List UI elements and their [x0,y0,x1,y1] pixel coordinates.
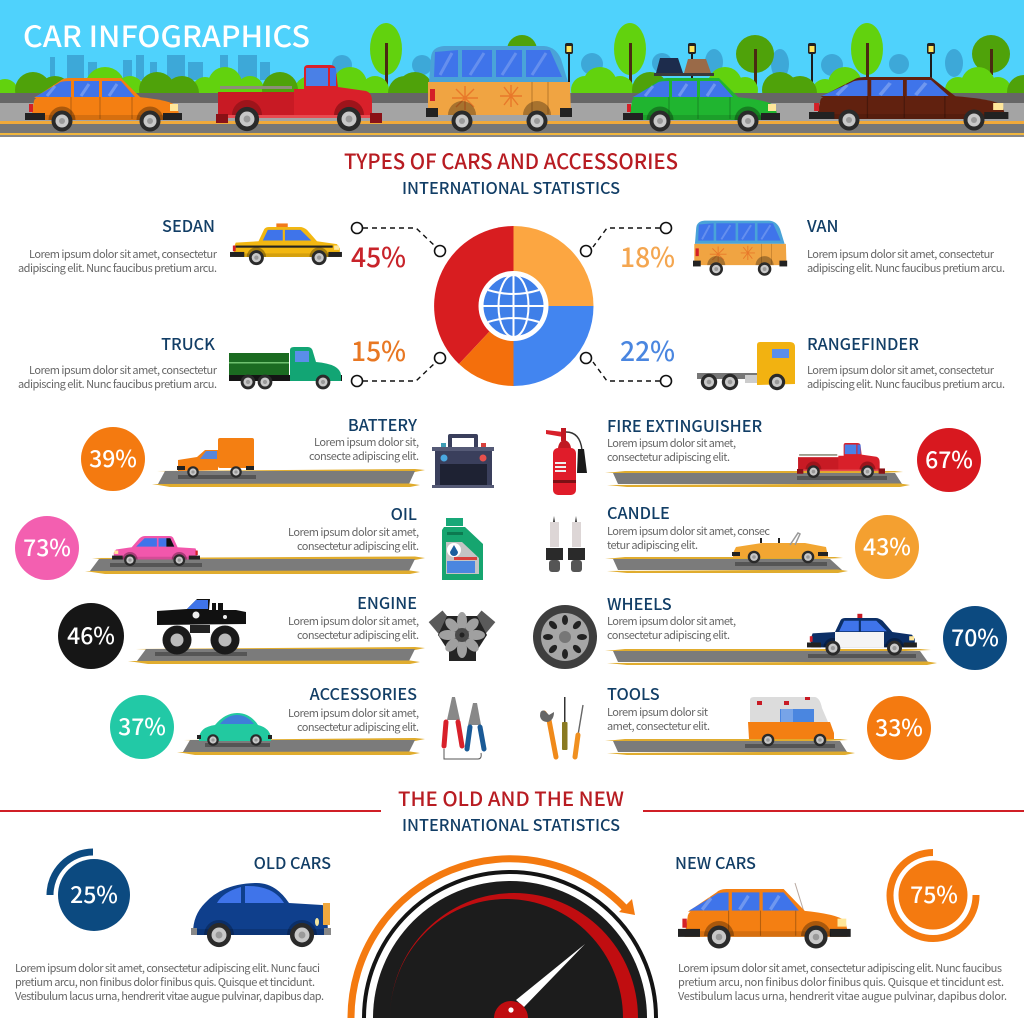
gauge: 75 percent: 75% [910,876,958,910]
text: candle body: Lorem ipsum dolor sit amet, consec [607,523,770,539]
text: tools body: amet, consectetur elit. [607,718,710,734]
city skyline [50,49,963,80]
icon: tools [540,697,583,757]
percent: 46: 46% [67,617,115,651]
panel: van [620,213,1005,276]
text: old cars body: Vestibulum lacus urna, hendrerit vitae augue pulvinar, dapibus dap. [15,988,324,1004]
title: types of cars: TYPES OF CARS AND ACCESSORIES [344,146,678,176]
percent: 67 [917,428,981,492]
panel: tools row [540,681,931,760]
percent: 43: 43% [863,528,911,562]
text: wheels body [607,613,736,643]
percent: 33: 33% [875,709,923,743]
car: green wagon with luggage [623,58,780,132]
percent: 18: 18% [620,236,675,275]
text: van body [807,246,1005,276]
text: van body: Lorem ipsum dolor sit amet, consectetur [807,246,995,262]
car: small pickup [797,443,885,478]
text: fire extinguisher body: consectetur adipiscing elit. [607,449,730,465]
road [605,739,855,755]
percent: 46 [58,603,124,669]
text: rangefinder body: Lorem ipsum dolor sit amet, consectetur [807,362,995,378]
percent: 37 [110,695,174,759]
text: rangefinder body [807,362,1005,392]
panel: engine row [58,590,495,669]
percent: 73 [15,516,79,580]
panel: battery row [81,412,494,491]
text: tools body [607,704,710,734]
header scene [0,0,1024,137]
car: brown limousine [809,77,1008,130]
panel: accessories row [110,681,484,759]
section divider lines [0,810,1024,812]
gauge: 25 percent [50,852,130,931]
text: new cars body: pretium arcu, non finibus dolor finibus quis. Quisque et tincidunt est. [678,974,1004,990]
heading: car infographics: CAR INFOGRAPHICS [23,14,310,56]
icon: extinguisher [546,428,587,495]
heading: fire extinguisher: FIRE EXTINGUISHER [607,413,763,437]
road [128,647,425,664]
speedometer gauge [351,859,656,1018]
subtitle: international statistics: INTERNATIONAL STATISTICS [402,175,620,199]
car: police [807,614,917,655]
percent: 33 [867,696,931,760]
car: teal beetle [197,713,272,746]
text: new cars body: Lorem ipsum dolor sit amet, consectetur adipiscing elit. Nunc faucibus [678,960,1002,976]
text: old cars body: Lorem ipsum dolor sit amet, consectetur adipiscing elit. Nunc fauci [15,960,320,976]
panel: old cars [15,850,331,1004]
icon: battery [432,434,494,488]
text: engine body: Lorem ipsum dolor sit amet, [288,613,419,629]
panel: fire extinguisher row [546,413,981,495]
icon: engine [429,611,495,661]
car: hippie van [426,46,572,132]
heading: candle: CANDLE [607,500,670,524]
icon: jumper cables [444,697,484,759]
heading: wheels: WHEELS [607,591,672,615]
road [0,93,1024,137]
percent: 37: 37% [118,708,166,742]
bushes [0,67,1024,111]
percent: 22: 22% [620,330,675,369]
text: wheels body: consectetur adipiscing elit. [607,627,730,643]
text: engine body [288,613,419,643]
heading: rangefinder: RANGEFINDER [807,331,919,355]
text: truck body: Lorem ipsum dolor sit amet, consectetur [29,362,218,378]
text: engine body: consectetur adipiscing elit. [297,627,419,643]
text: sedan body [18,246,218,276]
text: sedan body: Lorem ipsum dolor sit amet, consectetur [29,246,218,262]
road [152,469,425,487]
road [177,738,425,755]
heading: oil: OIL [391,501,417,525]
percent: 45: 45% [351,236,406,275]
car: box truck [177,438,254,478]
car: small van [693,221,787,276]
heading: accessories: ACCESSORIES [310,681,417,705]
text: accessories body: consectetur adipiscing elit. [297,719,419,735]
trees and lamps [370,23,1010,90]
heading: van: VAN [806,213,838,237]
gauge: 25 percent: 25% [70,876,118,910]
car: monster truck [157,599,246,654]
road [605,649,937,665]
road [605,557,848,573]
car: green truck [229,347,342,389]
road [605,471,910,487]
percent: 67: 67% [925,441,973,475]
car: old blue beetle [191,883,331,947]
text: accessories body: Lorem ipsum dolor sit amet, [288,705,419,721]
panel: candle row [546,500,919,579]
connector lines [352,222,672,386]
panel: sedan [18,213,406,276]
text: new cars body [678,960,1007,1004]
panel: oil row [15,501,483,580]
text: van body: adipiscing elit. Nunc faucibus pretium arcu. [807,260,1005,276]
percent: 39: 39% [89,440,137,474]
icon: spark plugs [546,516,585,572]
panel: new cars [675,850,1007,1004]
percent: 70: 70% [951,619,999,653]
text: sedan body: adipiscing elit. Nunc faucibus pretium arcu. [18,260,217,276]
car: red pickup [216,65,382,131]
percent: 43 [855,515,919,579]
gauge: 75 percent [890,852,976,938]
icon: oil can [442,518,483,580]
text: tools body: Lorem ipsum dolor sit [607,704,708,720]
pie chart [434,226,594,386]
subtitle: international statistics 2: INTERNATIONAL STATISTICS [402,812,620,836]
percent: 39 [81,427,145,491]
heading: new cars: NEW CARS [675,850,756,874]
text: battery body [309,434,419,464]
car: orange wagon [25,78,182,132]
percent: 15: 15% [351,330,406,369]
car: taxi [230,223,342,265]
heading: battery: BATTERY [348,412,418,436]
panel: truck [18,330,406,392]
car: pink sedan [112,536,200,566]
text: fire extinguisher body [607,435,736,465]
text: truck body: adipiscing elit. Nunc faucibus pretium arcu. [18,376,217,392]
text: wheels body: Lorem ipsum dolor sit amet, [607,613,736,629]
text: battery body: Lorem ipsum dolor sit, [314,434,419,450]
heading: truck: TRUCK [161,331,215,355]
percent: 70 [943,606,1007,670]
road [85,556,425,574]
text: old cars body: pretium arcu, non finibus dolor finibus quis. Quisque et tincidunt. [15,974,315,990]
car: semi tractor [697,342,795,390]
text: fire extinguisher body: Lorem ipsum dolor sit amet, [607,435,736,451]
percent: 73: 73% [23,529,71,563]
car: new orange wagon [678,883,851,949]
text: accessories body [288,705,419,735]
text: old cars body [15,960,324,1004]
arrow: orange arc [351,859,635,1018]
heading: engine: ENGINE [357,590,417,614]
heading: tools: TOOLS [607,681,660,705]
panel: rangefinder [620,330,1005,392]
car: convertible [732,533,828,563]
text: candle body: tetur adipiscing elit. [607,537,698,553]
text: oil body: Lorem ipsum dolor sit amet, [288,524,419,540]
text: rangefinder body: adipiscing elit. Nunc faucibus pretium arcu. [807,376,1005,392]
panel: wheels row [533,591,1007,670]
text: candle body [607,523,770,553]
car: ambulance [748,697,834,746]
text: truck body [18,362,218,392]
heading: sedan: SEDAN [162,213,215,237]
text: oil body [288,524,419,554]
heading: old cars: OLD CARS [254,850,331,874]
icon: globe [482,275,544,337]
text: oil body: consectetur adipiscing elit. [297,538,419,554]
text: battery body: consecte adipiscing elit. [309,448,419,464]
text: new cars body: Vestibulum lacus urna, hendrerit vitae augue pulvinar, dapibus dolor. [678,988,1007,1004]
title: old and new: THE OLD AND THE NEW [398,783,624,812]
icon: wheel [533,605,597,669]
